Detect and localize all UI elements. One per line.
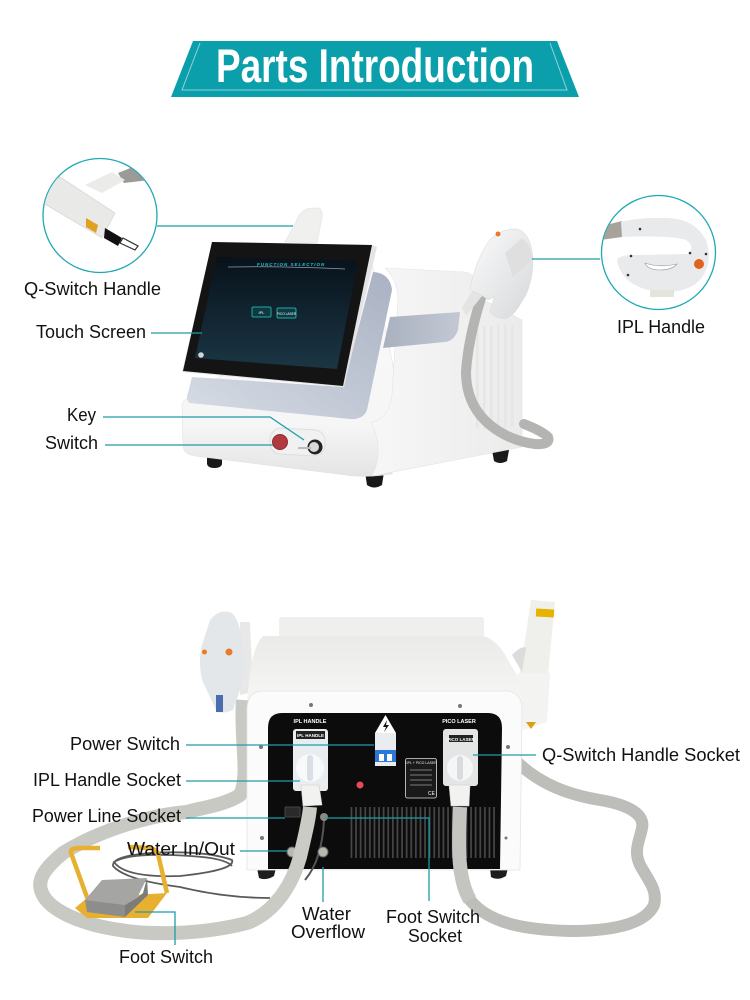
machine body side	[371, 268, 522, 476]
water connector left	[287, 847, 297, 857]
label: Water Overflow	[291, 903, 366, 942]
IPL handle holder	[240, 622, 253, 695]
panel red indicator	[356, 782, 364, 788]
label: Switch: Switch	[45, 432, 98, 453]
label: IPL Handle Socket: IPL Handle Socket	[33, 769, 181, 790]
label: Water Overflow: Water	[302, 903, 351, 924]
IPL handle rear view	[200, 612, 244, 713]
screen button PICO LASER	[277, 308, 297, 318]
IPL handle socket	[293, 729, 328, 806]
control panel recess	[269, 428, 326, 456]
rear black panel	[268, 713, 502, 869]
foot switch socket connector	[320, 813, 328, 821]
IPL handle cable	[466, 298, 548, 444]
IPL handle head	[505, 238, 532, 277]
foot switch cable	[113, 852, 270, 898]
label: IPL Handle: IPL Handle	[617, 316, 705, 337]
screen divider	[228, 267, 345, 269]
foot pedal	[85, 878, 148, 917]
body screws	[259, 703, 510, 840]
callout circle: Q-Switch handle	[38, 158, 157, 272]
label: Water In/Out: Water In/Out	[127, 838, 235, 859]
touch screen display	[195, 257, 358, 369]
machine foot right	[492, 450, 509, 463]
screen button IPL: IPL	[258, 310, 265, 315]
rating sticker	[405, 758, 437, 798]
left hose	[40, 700, 310, 933]
label: Water Overflow: Overflow	[291, 921, 366, 942]
panel label IPL handle: IPL HANDLE	[294, 719, 327, 725]
machine body front	[182, 267, 400, 476]
label: Foot Switch Socket	[386, 906, 480, 946]
Q-switch handle socket: PICO LASER	[447, 737, 475, 742]
machine rear body	[247, 691, 522, 870]
machine foot left	[207, 457, 222, 468]
label: Power Line Socket: Power Line Socket	[32, 805, 181, 826]
water connector right	[318, 847, 328, 857]
front machine illustration	[182, 208, 548, 488]
rating sticker: DPL + PICO LASER	[405, 761, 437, 765]
IPL handle socket: IPL HANDLE	[297, 733, 324, 738]
touch screen bezel	[182, 242, 377, 387]
vent grille	[350, 807, 497, 858]
Q-switch handle on top of machine	[285, 208, 322, 243]
panel label Pico laser: PICO LASER	[442, 719, 476, 725]
label: Foot Switch Socket: Foot Switch	[386, 906, 480, 927]
rating sticker: CE	[428, 791, 436, 797]
touch screen black frame	[183, 242, 372, 386]
screen settings icon	[198, 352, 204, 358]
foot pedal yellow frame	[71, 847, 167, 918]
screen button PICO LASER: PICO LASER	[277, 312, 297, 316]
thin cable at foot switch socket	[305, 820, 324, 880]
label: Touch Screen: Touch Screen	[36, 321, 146, 342]
right hose front segment	[459, 807, 470, 900]
label: Q-Switch Handle: Q-Switch Handle	[24, 278, 161, 299]
right hose	[459, 760, 655, 931]
label: Key: Key	[67, 404, 97, 425]
machine upper shell	[247, 636, 522, 700]
label: Foot Switch Socket: Socket	[408, 925, 462, 946]
left hose front segment	[247, 807, 310, 923]
machine feet	[257, 868, 508, 879]
machine foot center	[365, 472, 384, 488]
IPL handle	[470, 229, 533, 319]
power inlet	[285, 807, 300, 817]
key knob	[298, 440, 322, 454]
warning triangle	[375, 715, 396, 733]
label: Power Switch: Power Switch	[70, 733, 180, 754]
blue grey recess panel	[187, 272, 392, 419]
side grey strip	[383, 312, 460, 348]
red switch button	[272, 434, 288, 450]
back machine illustration	[40, 600, 655, 933]
Q-switch handle rear view	[520, 600, 555, 675]
title banner: Parts Introduction	[216, 39, 534, 92]
handle holder collar	[462, 288, 482, 316]
Q-switch handle socket	[443, 729, 478, 806]
screen button IPL	[252, 307, 271, 317]
label: Q-Switch Handle Socket: Q-Switch Handle Socket	[542, 744, 740, 765]
machine top lip	[279, 617, 484, 640]
label: Foot Switch: Foot Switch	[119, 946, 213, 967]
callout circle: IPL handle	[600, 196, 716, 310]
screen heading: FUNCTION SELECTION	[257, 262, 325, 267]
leader lines	[103, 226, 600, 945]
side vent slats	[476, 325, 514, 429]
power breaker	[375, 733, 396, 766]
